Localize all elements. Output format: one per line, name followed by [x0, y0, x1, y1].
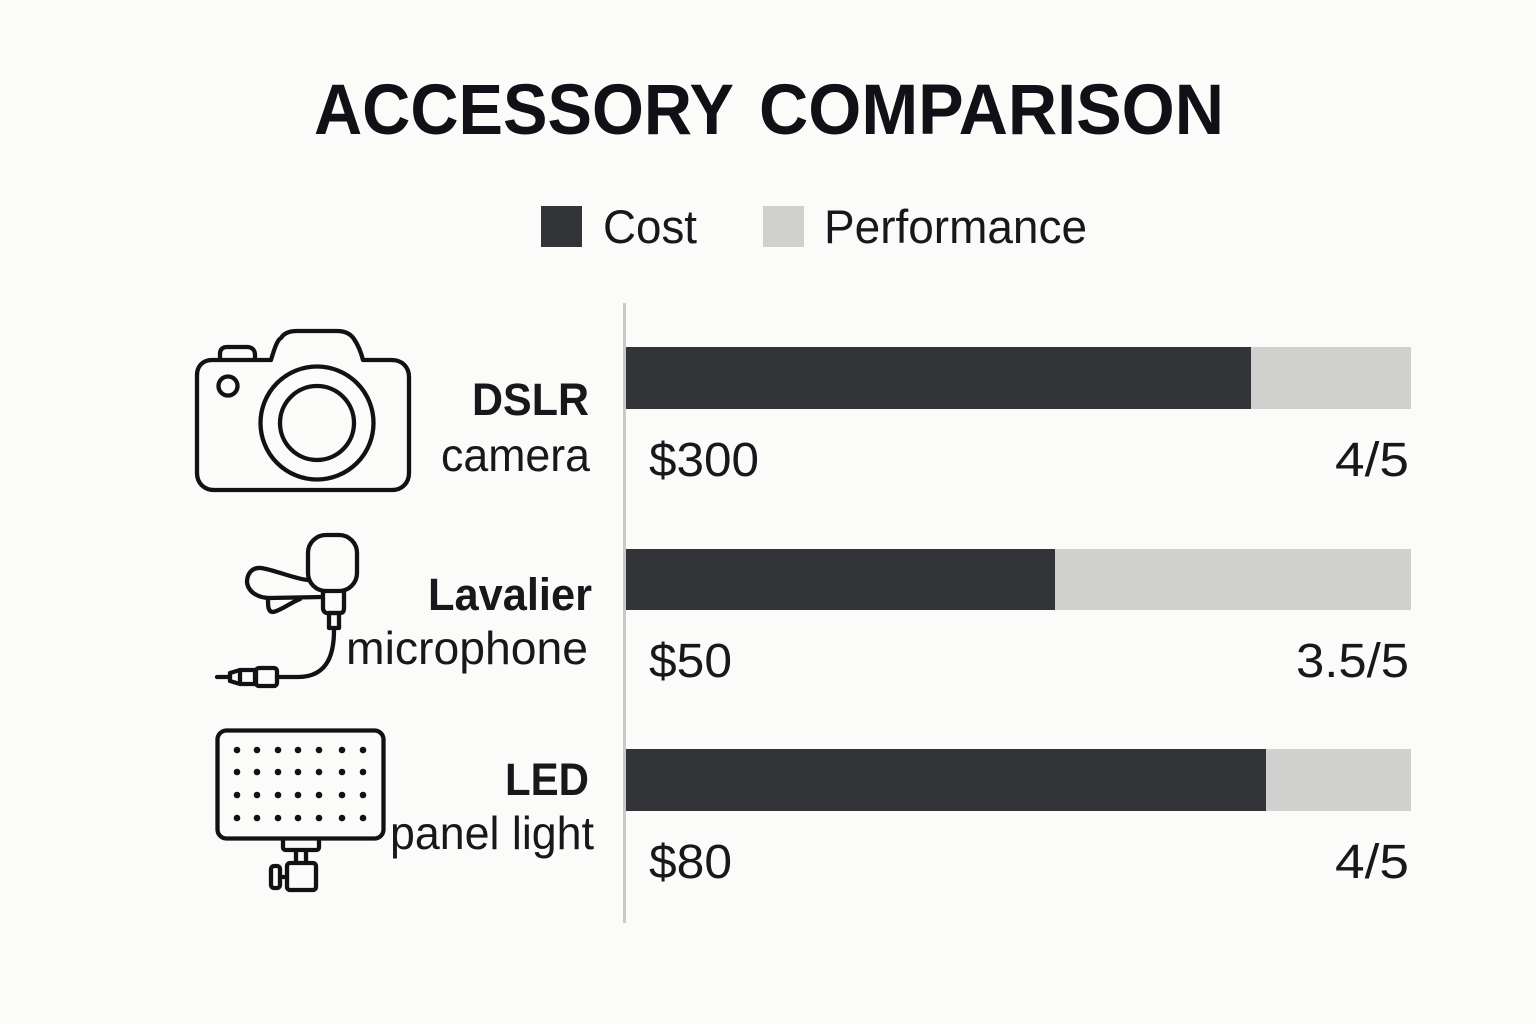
- legend: cost: Cost: [603, 200, 697, 253]
- label: DSLR camera: camera: [441, 429, 590, 481]
- legend: cost: [541, 200, 697, 253]
- legend: [541, 200, 1087, 253]
- label: Lavalier microphone: microphone: [346, 622, 588, 674]
- value: Lavalier cost: $50: [649, 635, 732, 688]
- label: DSLR camera: [441, 374, 590, 481]
- row: DSLR camera: [197, 331, 1411, 490]
- icon: LED panel light: [218, 730, 384, 890]
- row: Lavalier microphone: [217, 535, 1411, 688]
- title: ACCESSORY: [314, 71, 734, 150]
- value: LED cost: $80: [649, 836, 732, 889]
- value: Lavalier performance: 3.5/5: [1296, 635, 1409, 688]
- bar: LED cost and performance: [626, 749, 1411, 811]
- label: DSLR camera: DSLR: [472, 374, 589, 425]
- bar: DSLR cost and performance: [626, 347, 1411, 409]
- title: [314, 71, 1224, 150]
- title: COMPARISON: [759, 71, 1224, 150]
- label: LED panel light: LED: [505, 754, 589, 805]
- label: Lavalier microphone: Lavalier: [428, 569, 592, 620]
- row: LED panel light: [218, 730, 1411, 890]
- label: LED panel light: panel light: [390, 807, 594, 859]
- vertical axis line: [623, 303, 626, 923]
- label: LED panel light: [390, 754, 594, 859]
- icon: camera: [197, 331, 409, 490]
- bar: Lavalier cost and performance: [626, 549, 1411, 610]
- value: DSLR cost: $300: [649, 434, 759, 487]
- value: LED performance: 4/5: [1335, 836, 1409, 889]
- icon: lavalier microphone: [217, 535, 357, 686]
- legend: performance: Performance: [824, 200, 1087, 253]
- value: DSLR performance: 4/5: [1335, 434, 1409, 487]
- label: Lavalier microphone: [346, 569, 592, 674]
